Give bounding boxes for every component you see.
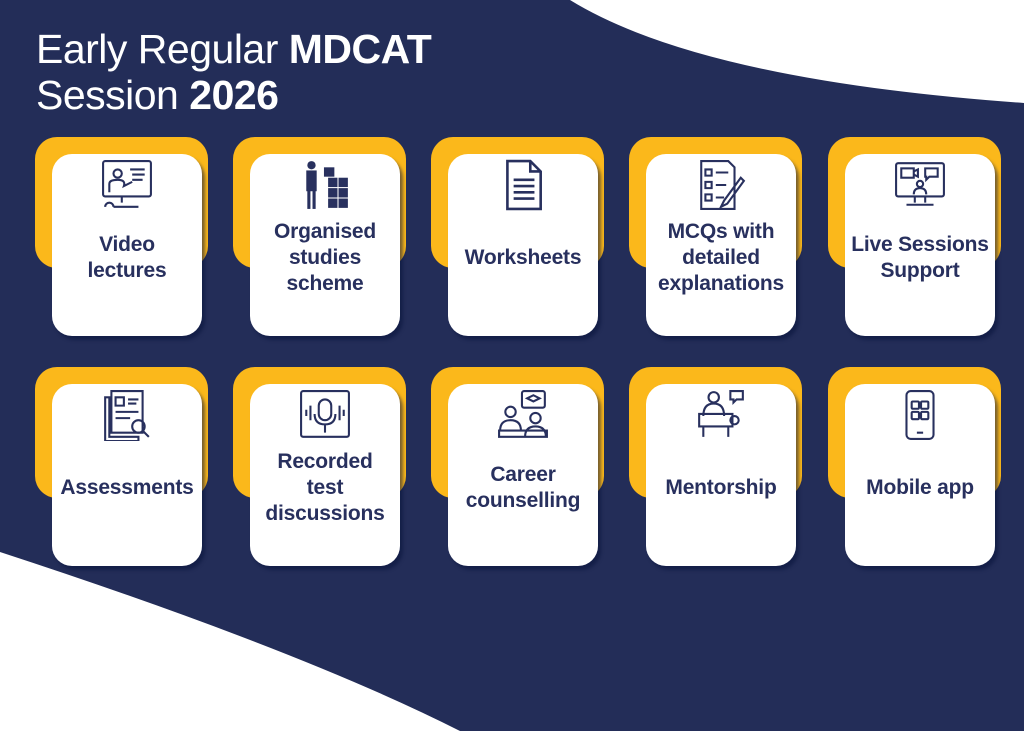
card: organised studies scheme: studies — [289, 246, 361, 269]
card: mentorship — [629, 367, 802, 570]
card: live sessions: Support — [880, 259, 960, 282]
card: assessments — [35, 367, 208, 570]
card: video lectures: Video — [99, 233, 155, 256]
card: organised studies scheme: Organised — [274, 220, 376, 243]
icon: counselling — [498, 390, 548, 438]
icon: checklist pencil — [700, 160, 746, 210]
card: mentorship: Mentorship — [665, 476, 777, 499]
card: worksheets — [431, 137, 604, 340]
card: live sessions: Live Sessions — [851, 233, 989, 256]
card: career counselling — [431, 367, 604, 570]
icon: documents magnifier — [104, 390, 150, 441]
card: MCQs: MCQs with — [668, 220, 774, 243]
card: video lectures: lectures — [88, 259, 166, 282]
title: Session 2026 — [36, 72, 278, 118]
card: career counselling: Career — [490, 463, 556, 486]
card: live sessions — [828, 137, 1001, 340]
card: organised studies scheme — [233, 137, 406, 340]
card: video lectures — [35, 137, 208, 340]
icon: microphone — [300, 390, 350, 438]
card: MCQs: detailed — [682, 246, 760, 269]
card: MCQs: explanations — [658, 272, 784, 295]
card: MCQs — [629, 137, 802, 340]
card: recorded test discussions: Recorded — [277, 450, 373, 473]
icon: monitor teacher — [102, 160, 152, 208]
card: recorded test discussions: discussions — [265, 502, 385, 525]
title — [36, 26, 432, 118]
icon: phone apps — [905, 390, 935, 440]
card: mobile app — [828, 367, 1001, 570]
card: worksheets: Worksheets — [465, 246, 581, 269]
title: Early Regular MDCAT — [36, 26, 431, 72]
card: mobile app: Mobile app — [866, 476, 974, 499]
icon: person with boxes — [306, 161, 348, 209]
card: assessments: Assessments — [60, 476, 194, 499]
icon: mentorship — [698, 390, 744, 437]
card: recorded test discussions: test — [307, 476, 343, 499]
card: recorded test discussions — [233, 367, 406, 570]
icon: live session screen — [895, 162, 945, 206]
card: career counselling: counselling — [466, 489, 580, 512]
card: organised studies scheme: scheme — [286, 272, 364, 295]
icon: document — [506, 160, 542, 210]
